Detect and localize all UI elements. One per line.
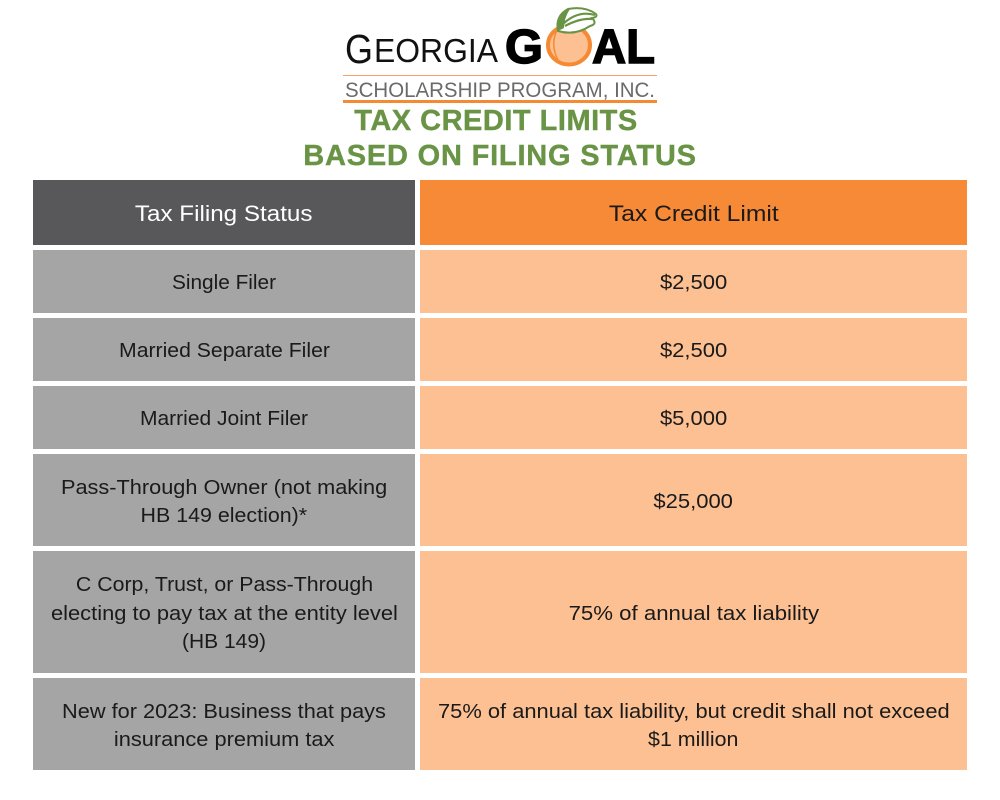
row 3 limit: $5,000	[660, 408, 727, 430]
table header: tax credit limit: Tax Credit Limit	[609, 201, 778, 226]
row 4 status	[33, 454, 415, 546]
logo wordmark: Georgia	[345, 26, 498, 72]
row 5 status: electing to pay tax at the entity level	[51, 603, 397, 625]
row 5 limit: 75% of annual tax liability	[568, 603, 819, 625]
row 5 status	[33, 551, 415, 673]
row 1 status: Single Filer	[172, 272, 276, 294]
row 3 status: Married Joint Filer	[140, 408, 308, 430]
logo wordmark: G: G	[505, 21, 543, 74]
row 4 limit: $25,000	[654, 491, 733, 513]
row 2 status: Married Separate Filer	[119, 340, 329, 362]
logo: Georgia GOAL Scholarship Program	[343, 7, 657, 103]
logo subtitle: SCHOLARSHIP PROGRAM, INC.	[345, 79, 655, 102]
title	[303, 105, 697, 172]
logo rule: thin	[343, 75, 657, 76]
row 1 limit: $2,500	[660, 272, 727, 294]
row 6 limit: 75% of annual tax liability, but credit shall not exceed	[438, 700, 949, 722]
icon: peach	[548, 8, 596, 65]
logo wordmark: Georgia: G	[345, 26, 373, 72]
row 4 status: HB 149 election)*	[141, 505, 307, 527]
row 6 limit	[420, 678, 967, 770]
row 3 limit	[420, 386, 967, 449]
row 5 limit	[420, 551, 967, 673]
row 2 limit: $2,500	[660, 340, 727, 362]
logo rule: thick	[343, 100, 657, 103]
logo wordmark: Georgia: EORGIA	[374, 32, 498, 69]
title: TAX CREDIT LIMITS	[354, 105, 638, 137]
title: BASED ON FILING STATUS	[303, 140, 697, 172]
row 2 status	[33, 318, 415, 381]
row 1 limit	[420, 250, 967, 313]
row 6 status: New for 2023: Business that pays	[62, 700, 386, 722]
table header: tax credit limit	[420, 180, 967, 245]
row 3 status	[33, 386, 415, 449]
row 4 limit	[420, 454, 967, 546]
logo wordmark: AL: AL	[592, 21, 655, 74]
table header: tax filing status: Tax Filing Status	[135, 201, 313, 226]
row 4 status: Pass-Through Owner (not making	[61, 476, 387, 498]
row 5 status: C Corp, Trust, or Pass-Through	[75, 574, 373, 596]
row 2 limit	[420, 318, 967, 381]
row 6 limit: $1 million	[648, 729, 739, 751]
row 6 status: insurance premium tax	[114, 729, 334, 751]
row 5 status: (HB 149)	[182, 631, 266, 653]
row 6 status	[33, 678, 415, 770]
row 1 status	[33, 250, 415, 313]
table header: tax filing status	[33, 180, 415, 245]
